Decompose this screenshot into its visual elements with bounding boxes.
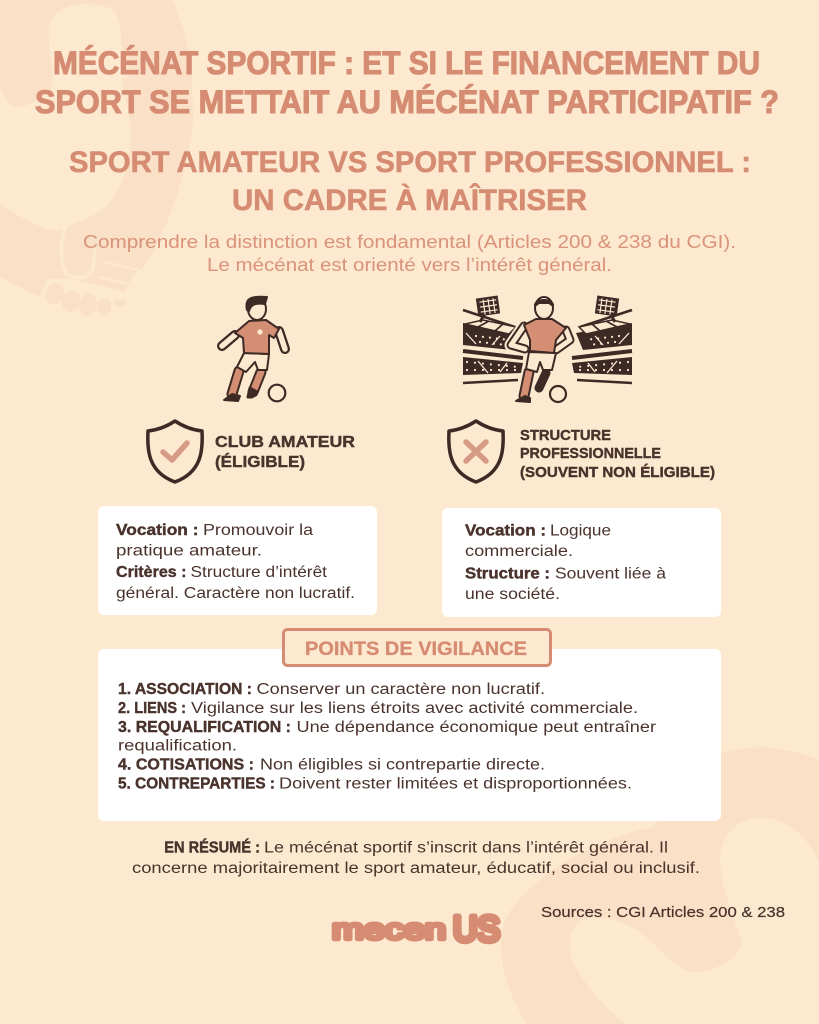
subtitle: UN CADRE À MAÎTRISER: [232, 183, 587, 217]
panel: club amateur card: pratique amateur.: [116, 542, 262, 560]
logo: mecenUS: mecen: [332, 914, 446, 946]
panel: club amateur card: Vocation :: [116, 522, 198, 539]
panel: club amateur card: Critères :: [116, 564, 186, 581]
panel: structure professionnelle card: [442, 508, 721, 617]
summary text: [132, 840, 700, 877]
label: club amateur: CLUB AMATEUR: [215, 434, 355, 451]
panel: points de vigilance: 2. LIENS :: [118, 700, 186, 717]
panel: points de vigilance: 3. REQUALIFICATION :: [118, 719, 291, 736]
panel: points de vigilance: 1. ASSOCIATION :: [118, 681, 252, 698]
panel: points de vigilance: [98, 649, 721, 821]
subtitle: [69, 146, 751, 217]
label: club amateur: (ÉLIGIBLE): [215, 452, 305, 471]
label: structure professionnelle: STRUCTURE: [520, 428, 611, 444]
icon: shield with cross: [449, 421, 503, 482]
panel: points de vigilance: 4. COTISATIONS :: [118, 756, 254, 774]
panel: structure professionnelle card: Vocation :: [465, 522, 546, 540]
panel: structure professionnelle card: commerciale.: [465, 543, 573, 560]
background: handshake motif bottom right: [501, 747, 819, 1024]
panel: structure professionnelle card: Logique: [550, 522, 611, 540]
panel: structure professionnelle card: Souvent liée à: [555, 566, 666, 582]
label: structure professionnelle: (SOUVENT NON ÉLIGIBLE): [520, 464, 715, 481]
intro text: Comprendre la distinction est fondamental (Articles 200 & 238 du CGI).: [83, 232, 736, 252]
icon: shield with check: [148, 421, 202, 482]
panel: points de vigilance: Une dépendance économique peut entraîner: [296, 719, 656, 736]
title: MÉCÉNAT SPORTIF : ET SI LE FINANCEMENT DU: [53, 45, 760, 81]
intro text: [83, 232, 736, 275]
summary text: concerne majoritairement le sport amateur, éducatif, social ou inclusif.: [132, 860, 700, 877]
label: structure professionnelle: [520, 428, 715, 481]
title: SPORT SE METTAIT AU MÉCÉNAT PARTICIPATIF ?: [35, 84, 779, 120]
icon: professional player in stadium: [463, 296, 632, 402]
panel: club amateur card: Promouvoir la: [203, 522, 313, 539]
panel: club amateur card: Structure d’intérêt: [190, 564, 328, 581]
panel: points de vigilance: requalification.: [118, 738, 237, 754]
logo: mecenUS: [332, 910, 500, 949]
icon: amateur football player: [222, 297, 285, 401]
sources: Sources : CGI Articles 200 & 238: [541, 905, 785, 921]
panel: points de vigilance: 5. CONTREPARTIES :: [118, 776, 275, 792]
panel: structure professionnelle card: Structure :: [465, 566, 550, 582]
panel: points de vigilance: Non éligibles si contrepartie directe.: [260, 756, 545, 774]
player: [511, 297, 570, 402]
summary text: Le mécénat sportif s’inscrit dans l’intérêt général. Il: [264, 840, 668, 856]
stadium stands right: [572, 296, 632, 383]
panel: club amateur card: général. Caractère non lucratif.: [116, 585, 355, 602]
panel: club amateur card: [98, 506, 377, 615]
label: club amateur: [215, 434, 355, 471]
background: handshake motif top left: [0, 0, 193, 317]
heading badge: points de vigilance: POINTS DE VIGILANCE: [305, 638, 527, 660]
stadium stands left: [463, 296, 523, 383]
title: [35, 45, 779, 120]
intro text: Le mécénat est orienté vers l’intérêt général.: [207, 255, 612, 275]
summary text: EN RÉSUMÉ :: [164, 840, 260, 856]
heading badge: points de vigilance: [284, 630, 550, 666]
panel: points de vigilance: Vigilance sur les liens étroits avec activité commerciale.: [191, 700, 638, 717]
panel: structure professionnelle card: une société.: [465, 586, 560, 603]
panel: points de vigilance: Conserver un caractère non lucratif.: [256, 681, 545, 698]
subtitle: SPORT AMATEUR VS SPORT PROFESSIONNEL :: [69, 146, 751, 179]
label: structure professionnelle: PROFESSIONNELLE: [520, 446, 661, 462]
logo: mecenUS: US: [453, 910, 500, 949]
panel: points de vigilance: Doivent rester limitées et disproportionnées.: [279, 776, 632, 792]
